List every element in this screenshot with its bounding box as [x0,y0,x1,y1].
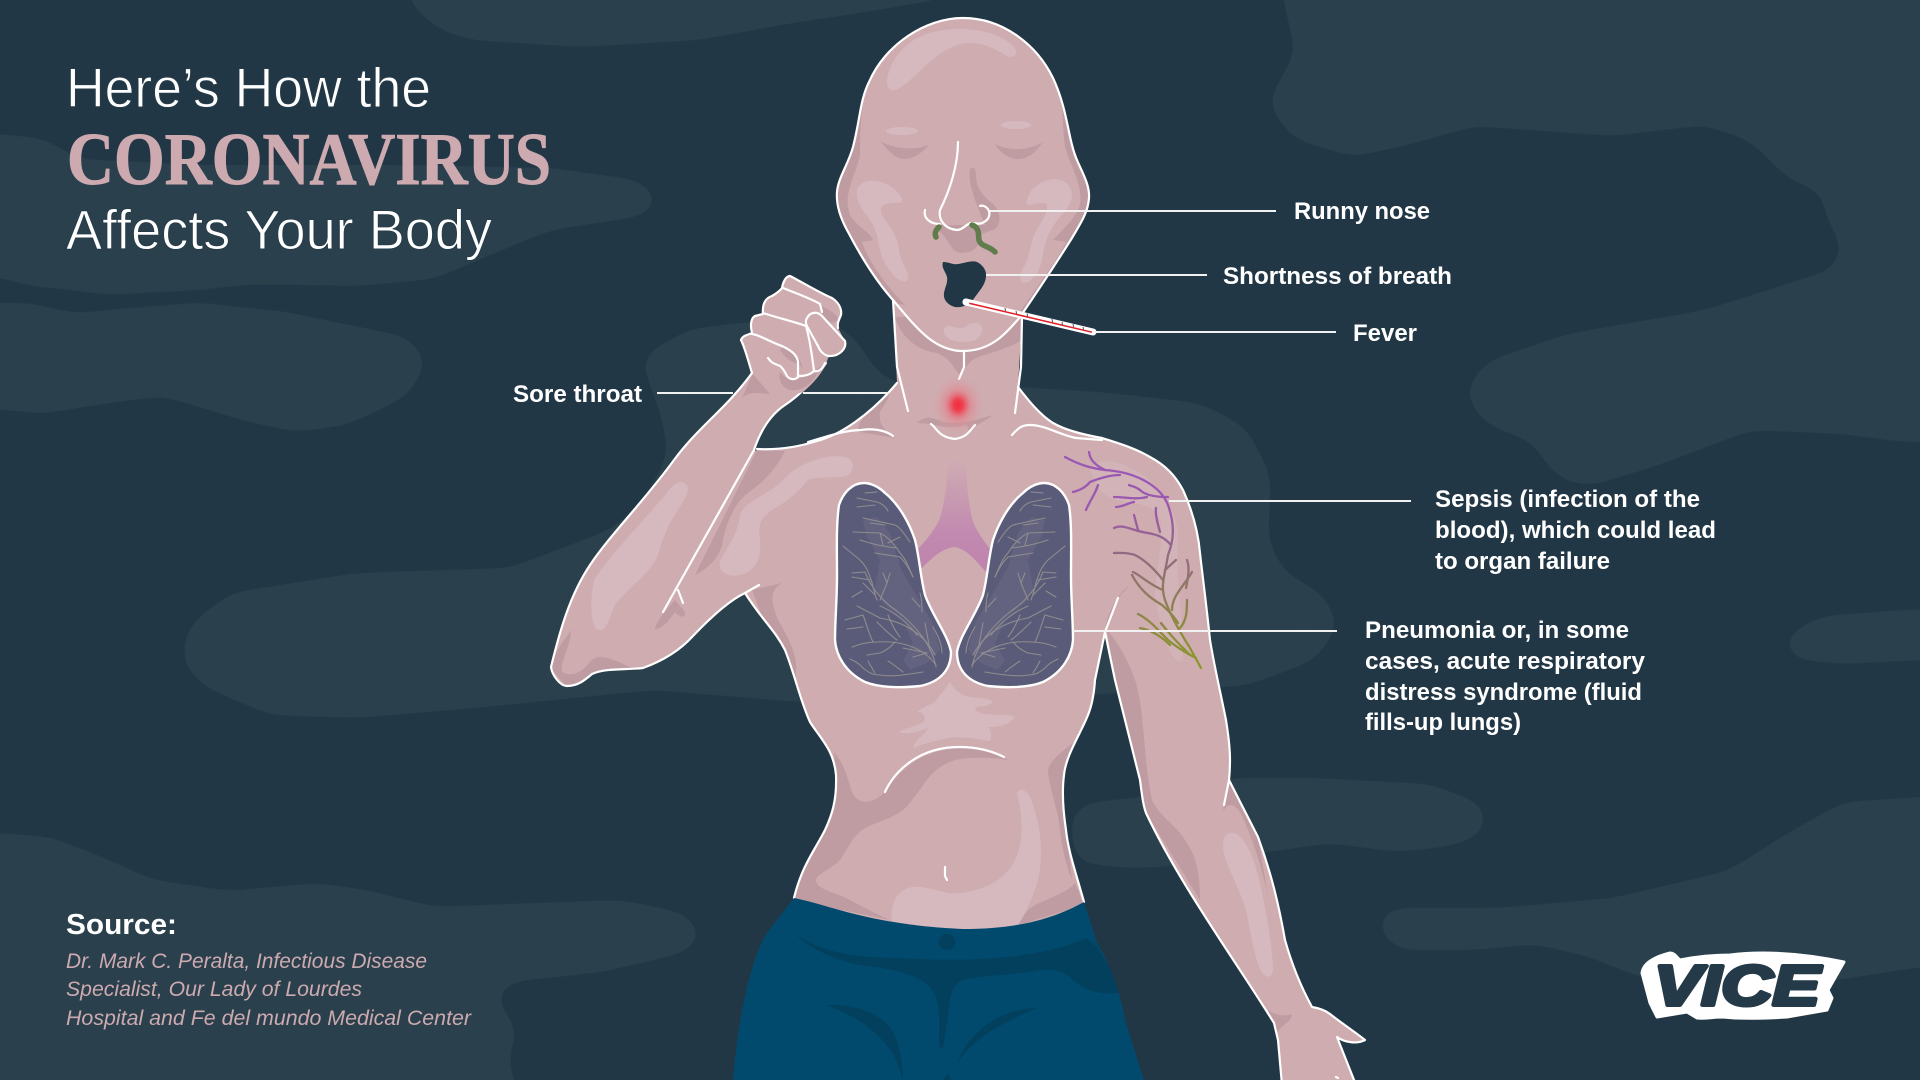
source: Dr. Mark C. Peralta, Infectious Disease [66,950,427,973]
body white outlines [551,300,1365,1080]
title: Here’s How the [66,56,431,119]
source [66,909,472,1030]
callout: sepsis: blood), which could lead [1435,517,1716,544]
nose [925,142,989,230]
title [66,56,551,261]
callout: fever: Fever [1353,320,1417,347]
lung airway [915,460,992,572]
source: Hospital and Fe del mundo Medical Center [66,1007,472,1030]
source: Specialist, Our Lady of Lourdes [66,978,363,1001]
VICE logo: VICE [1654,954,1822,1018]
callout: pneumonia [1073,617,1646,736]
raised arm silhouette [551,363,826,686]
sepsis blood vessels [1065,452,1201,668]
callout: pneumonia: fills-up lungs) [1365,709,1521,736]
human figure [550,18,1365,1080]
icon: thermometer [962,298,1093,332]
callout: pneumonia: distress syndrome (fluid [1365,679,1642,706]
left lung [835,483,951,687]
mouth [943,261,986,307]
callout: pneumonia: Pneumonia or, in some [1365,617,1629,644]
head [830,18,1100,351]
icon: sore throat glow [932,375,984,435]
callout: sepsis: Sepsis (infection of the [1435,486,1700,513]
title: CORONAVIRUS [67,119,551,201]
jeans [733,898,1144,1080]
callout: sore throat: Sore throat [513,381,642,408]
callout: sepsis [1169,486,1716,575]
right lung [957,483,1073,687]
icon: runny nose mucus [935,225,995,252]
body shading [550,317,1292,1035]
callout: runny nose: Runny nose [1294,198,1430,225]
title: Affects Your Body [66,198,492,261]
callout: sepsis: to organ failure [1435,548,1610,575]
fist [741,276,846,400]
source: Source: [66,909,177,941]
callout: shortness of breath: Shortness of breath [1223,263,1452,290]
callout: pneumonia: cases, acute respiratory [1365,648,1646,675]
VICE logo [1642,953,1844,1018]
head outline [837,18,1089,351]
torso and lowered arm silhouette [745,300,1365,1080]
